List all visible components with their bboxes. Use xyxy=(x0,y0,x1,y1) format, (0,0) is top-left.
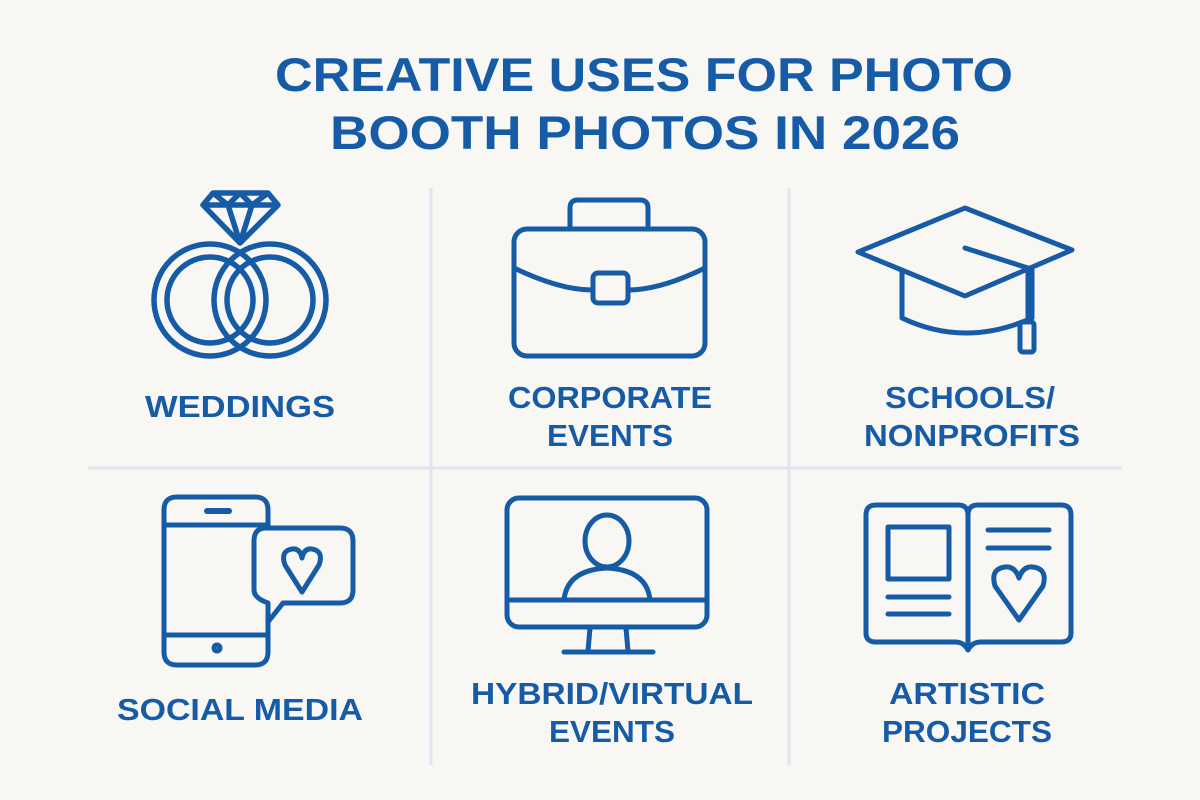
label: artistic projects: PROJECTS xyxy=(882,714,1052,749)
label: schools/nonprofits: NONPROFITS xyxy=(864,418,1080,453)
label: weddings: WEDDINGS xyxy=(145,389,335,424)
icon: rings xyxy=(154,193,326,356)
label: schools/nonprofits: SCHOOLS/ xyxy=(885,380,1055,415)
panel: artistic projects xyxy=(866,505,1071,749)
title: BOOTH PHOTOS IN 2026 xyxy=(330,106,960,159)
panel: social media xyxy=(117,497,363,727)
icon: open book xyxy=(866,505,1071,650)
panel: corporate events xyxy=(508,200,712,453)
panel: weddings xyxy=(145,193,335,424)
icon: briefcase xyxy=(514,200,705,356)
title: CREATIVE USES FOR PHOTO xyxy=(275,48,1013,101)
label: corporate events xyxy=(508,380,712,453)
panel: schools/nonprofits xyxy=(858,208,1080,453)
label: hybrid/virtual events: EVENTS xyxy=(549,714,675,749)
label: hybrid/virtual events: HYBRID/VIRTUAL xyxy=(471,676,753,711)
label: artistic projects: ARTISTIC xyxy=(889,676,1045,711)
label: social media: SOCIAL MEDIA xyxy=(117,692,363,727)
panel: hybrid/virtual events xyxy=(471,498,753,749)
icon: graduation cap xyxy=(858,208,1072,352)
label: schools/nonprofits xyxy=(864,380,1080,453)
title xyxy=(275,48,1013,159)
label: corporate events: EVENTS xyxy=(547,418,673,453)
icon: phone with heart bubble xyxy=(164,497,353,665)
label: hybrid/virtual events xyxy=(471,676,753,749)
icon: monitor with person xyxy=(507,498,707,652)
label: corporate events: CORPORATE xyxy=(508,380,712,415)
label: artistic projects xyxy=(882,676,1052,749)
